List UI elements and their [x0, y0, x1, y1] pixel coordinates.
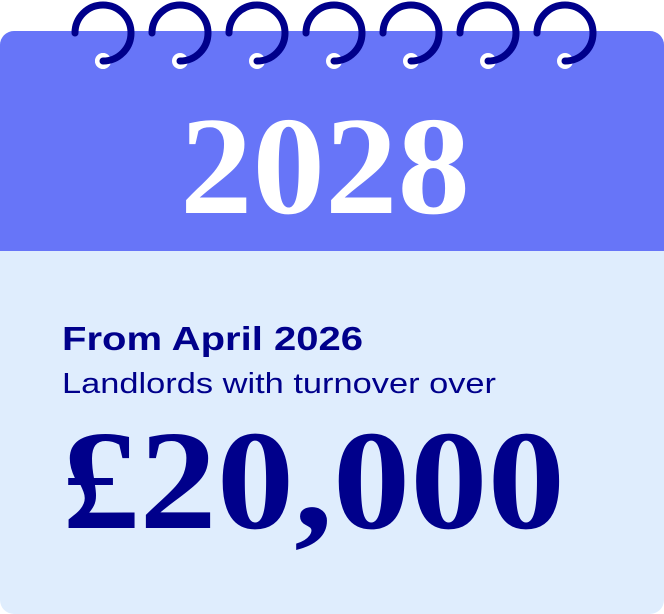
subheading: date: From April 2026 — [62, 320, 363, 357]
rings — [75, 5, 593, 69]
heading: year: 2028 — [180, 89, 470, 244]
rings: binding — [75, 5, 131, 69]
big number: threshold: £20,000 — [62, 401, 565, 559]
text: description: Landlords with turnover over — [62, 368, 496, 400]
